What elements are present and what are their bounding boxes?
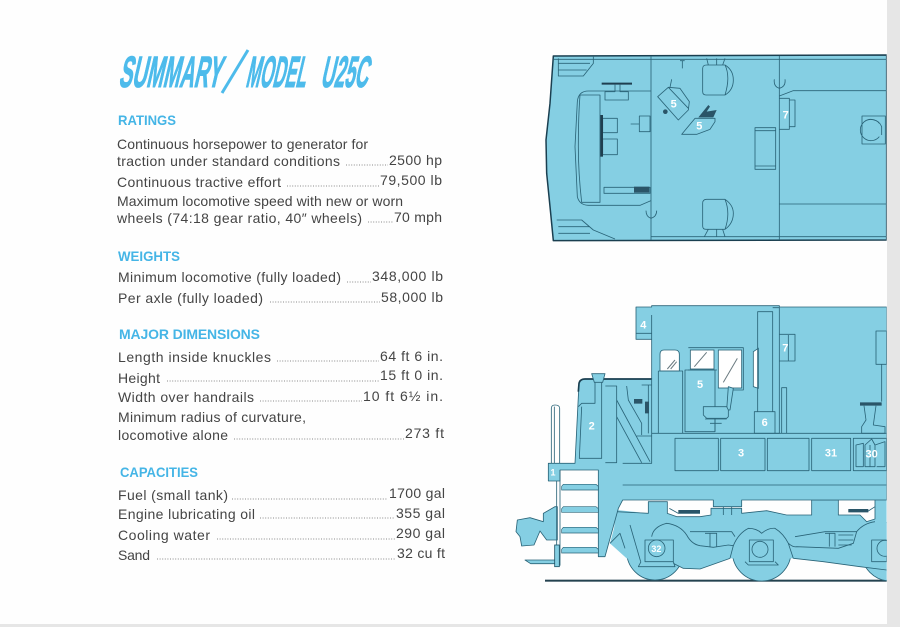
cab lower panels bbox=[658, 370, 715, 433]
row: fuel: Fuel (small tank) bbox=[118, 487, 228, 503]
number hood 2: 2 bbox=[589, 420, 595, 432]
truck frame bbox=[610, 500, 893, 572]
row: minimum locomotive: Minimum locomotive (fully loaded) bbox=[118, 269, 341, 285]
windows bbox=[660, 348, 758, 390]
hood panels bbox=[675, 438, 887, 471]
ground line bbox=[545, 580, 888, 582]
row: width: 10 ft 6½ in. bbox=[363, 388, 443, 404]
row: per axle: Per axle (fully loaded) bbox=[118, 290, 263, 306]
row: sand: Sand bbox=[118, 547, 150, 563]
seat: lower bbox=[703, 199, 733, 237]
wheels bbox=[627, 522, 900, 581]
row: height bbox=[118, 367, 443, 386]
locomotive cab plan view bbox=[546, 55, 887, 241]
row: length: Length inside knuckles bbox=[118, 349, 271, 365]
row: water bbox=[118, 525, 445, 543]
title: SUMMARY bbox=[116, 49, 229, 97]
cab fixture bbox=[634, 399, 649, 413]
row: maximum speed: Maximum locomotive speed with new or worn bbox=[117, 193, 403, 209]
row: water: Cooling water bbox=[118, 527, 210, 543]
row: tractive effort bbox=[117, 172, 442, 190]
circular hatch bbox=[860, 116, 885, 144]
row: continuous horsepower: traction under standard conditions bbox=[117, 153, 340, 169]
coupler bbox=[516, 507, 557, 546]
row: height: Height bbox=[118, 370, 160, 386]
seat bbox=[697, 379, 733, 432]
heading: ratings: RATINGS bbox=[118, 112, 176, 128]
row: maximum speed: wheels (74:18 gear ratio, 40″ wheels) bbox=[116, 210, 362, 226]
section: major dimensions bbox=[118, 326, 444, 443]
section: capacities bbox=[118, 464, 445, 563]
row: sand: 32 cu ft bbox=[397, 545, 445, 561]
row: width: Width over handrails bbox=[118, 389, 254, 405]
column 6 bbox=[754, 308, 779, 433]
row: length: 64 ft 6 in. bbox=[380, 348, 443, 364]
row: tractive effort: Continuous tractive effort bbox=[117, 174, 281, 190]
stack bbox=[592, 374, 605, 382]
hand brake stub bbox=[680, 61, 685, 68]
item 7 housing bbox=[779, 91, 887, 204]
label 1: 1 bbox=[550, 468, 555, 478]
row: length bbox=[118, 348, 443, 365]
row: oil: 355 gal bbox=[396, 505, 445, 521]
row: width bbox=[118, 388, 443, 405]
row: water: 290 gal bbox=[396, 525, 445, 541]
control desk: 5 bbox=[696, 121, 702, 133]
cab box 4: 4 bbox=[640, 320, 647, 332]
steps bbox=[555, 470, 598, 567]
seat: upper bbox=[703, 58, 733, 95]
heading: major dimensions: MAJOR DIMENSIONS bbox=[119, 326, 260, 342]
row: radius: Minimum radius of curvature, bbox=[118, 409, 306, 425]
row: per axle: 58,000 lb bbox=[381, 289, 443, 305]
hood panels: 3 bbox=[738, 447, 744, 459]
row: radius: 273 ft bbox=[405, 425, 444, 441]
row: continuous horsepower: Continuous horsepower to generator for bbox=[117, 136, 368, 152]
row: fuel: 1700 gal bbox=[389, 485, 445, 501]
text: U25C bbox=[318, 49, 376, 97]
item 7 housing: 7 bbox=[783, 110, 789, 122]
row: minimum locomotive bbox=[118, 268, 443, 285]
heading: weights: WEIGHTS bbox=[118, 248, 180, 264]
row: tractive effort: 79,500 lb bbox=[380, 172, 442, 188]
row: radius bbox=[118, 409, 444, 443]
cab box 4 bbox=[636, 320, 652, 333]
title: MODEL bbox=[243, 49, 314, 97]
row: continuous horsepower: 2500 hp bbox=[389, 152, 442, 168]
item 7 box bbox=[779, 334, 795, 361]
body detail lines bbox=[578, 315, 887, 485]
bolster pin bbox=[723, 504, 732, 515]
section: ratings bbox=[116, 112, 442, 226]
row: maximum speed bbox=[116, 193, 442, 226]
row: fuel bbox=[118, 485, 445, 503]
pipe bbox=[782, 388, 787, 433]
control stand: 5 bbox=[671, 98, 677, 110]
item 30 cabinet: 30 bbox=[866, 448, 878, 460]
cabinet bbox=[755, 128, 776, 169]
control stand bbox=[658, 79, 689, 120]
row: minimum locomotive: 348,000 lb bbox=[372, 268, 443, 284]
row: radius: locomotive alone bbox=[118, 427, 228, 443]
locomotive side elevation bbox=[516, 306, 900, 582]
control desk bbox=[682, 105, 717, 134]
row: continuous horsepower bbox=[117, 136, 442, 169]
row: maximum speed: 70 mph bbox=[394, 209, 442, 225]
row: per axle bbox=[118, 289, 443, 306]
door handles bbox=[646, 79, 785, 218]
row: oil: Engine lubricating oil bbox=[118, 506, 255, 522]
truck frame: 32 bbox=[651, 544, 661, 554]
heading: capacities: CAPACITIES bbox=[120, 464, 198, 480]
lower footboard bbox=[525, 560, 555, 564]
item 30 cabinet bbox=[856, 439, 885, 467]
section: weights bbox=[118, 248, 443, 306]
row: oil bbox=[118, 505, 445, 522]
column 6: 6 bbox=[762, 417, 768, 429]
row: height: 15 ft 0 in. bbox=[380, 367, 443, 383]
handrail bbox=[551, 405, 560, 463]
link rods bbox=[669, 507, 875, 513]
right equipment bbox=[860, 331, 887, 433]
seat: 5 bbox=[697, 379, 703, 391]
item 7 box: 7 bbox=[782, 343, 788, 355]
body bbox=[548, 306, 887, 557]
row: sand bbox=[118, 545, 445, 563]
hood panels: 31 bbox=[825, 447, 837, 459]
hood top edge bbox=[578, 379, 652, 392]
